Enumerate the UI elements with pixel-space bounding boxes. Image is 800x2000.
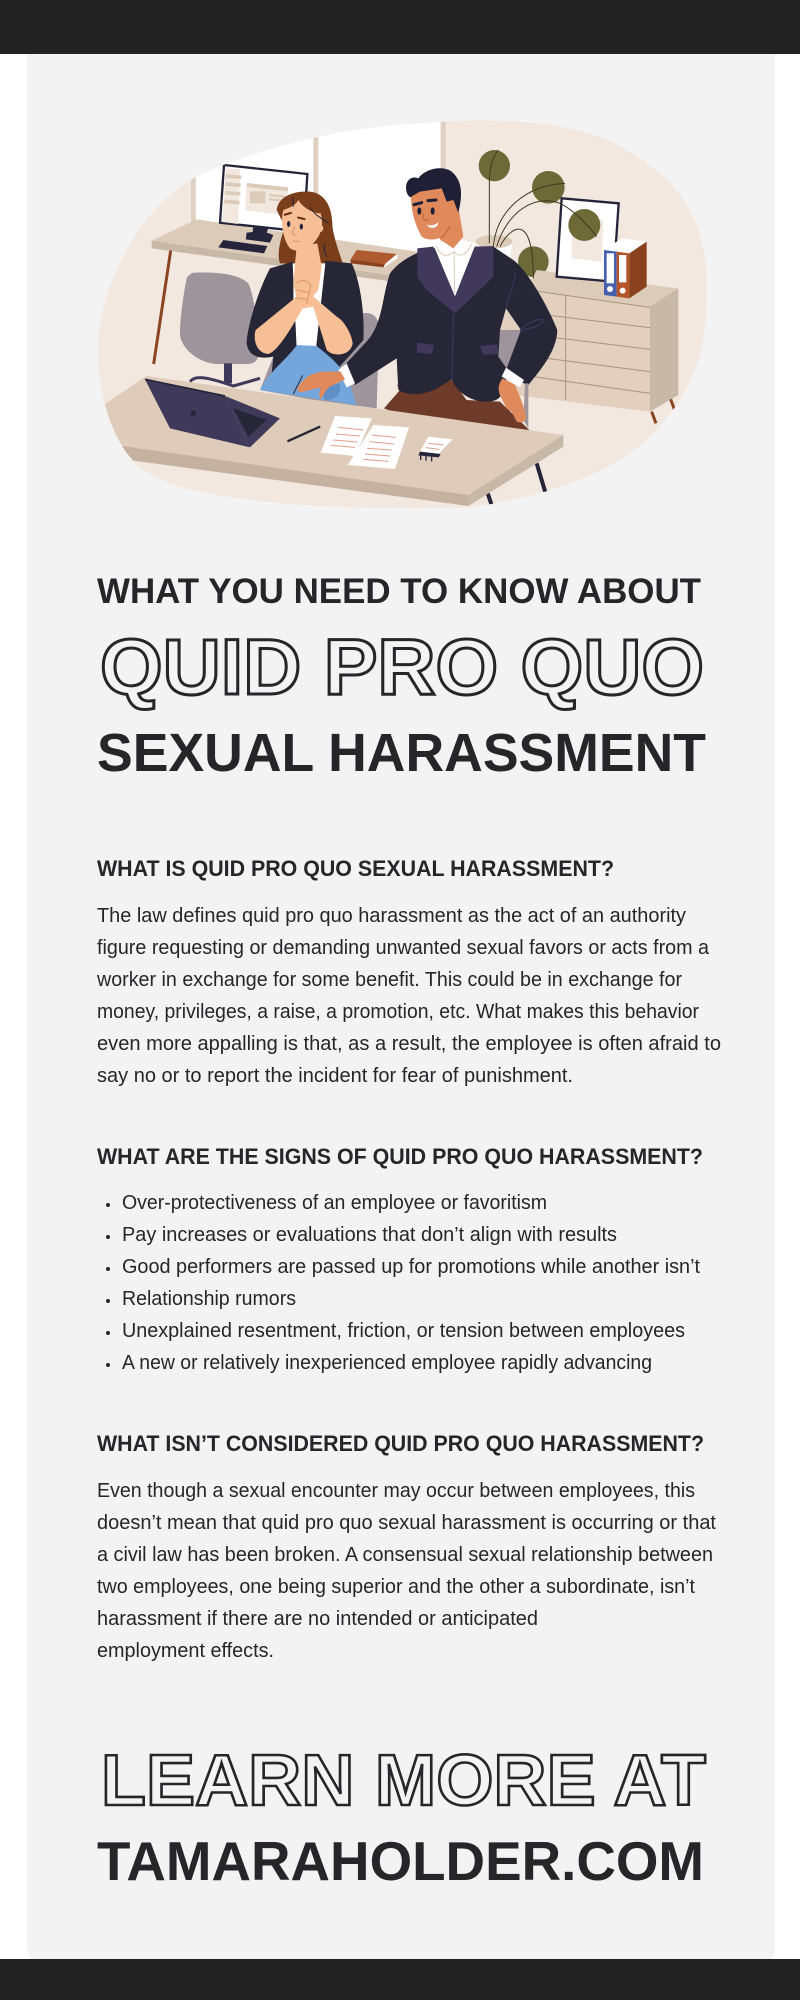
section body: The law defines quid pro quo harassment as the act of an authority [97,905,686,927]
woman's office chair [180,272,379,408]
shirt [433,237,476,297]
section body: a civil law has been broken. A consensual sexual relationship between [97,1544,713,1566]
section body: Even though a sexual encounter may occur between employees, this [97,1480,695,1502]
jacket [247,261,364,373]
face [282,200,322,251]
section body: even more appalling is that, as a result, the employee is often afraid to [97,1033,721,1055]
title line 1: WHAT YOU NEED TO KNOW ABOUT [97,572,701,611]
binders [604,238,647,298]
neck and chest [293,243,322,300]
bullet list: Relationship rumors [122,1288,296,1310]
sleeve lines and pockets [406,168,544,428]
learn more outlined: LEARN MORE AT [101,1741,706,1821]
monitor and keyboard [218,165,307,253]
skirt [260,345,356,405]
title [97,572,706,783]
bullet list [106,1192,700,1374]
section body: harassment if there are no intended or anticipated [97,1608,538,1630]
woman [247,192,364,405]
back desk [152,219,433,364]
notepad [418,437,453,461]
chair behind man [396,383,398,387]
title line 3: SEXUAL HARASSMENT [97,723,706,783]
book [351,250,397,267]
section body: doesn’t mean that quid pro quo sexual harassment is occurring or that [97,1512,716,1534]
bullet list: A new or relatively inexperienced employee rapidly advancing [122,1352,652,1374]
section body [96,905,721,1087]
plant stems and pot [476,150,565,277]
front desk [93,376,563,506]
top bar [0,0,800,54]
cabinet with plant, picture and binders [476,150,678,423]
section: signs [97,1144,703,1374]
section body: say no or to report the incident for fear of punishment. [97,1065,573,1087]
section: what it isn't [97,1431,716,1662]
papers [321,416,409,469]
front desk legs [488,463,547,505]
bullet list: Over-protectiveness of an employee or favoritism [122,1192,547,1214]
bullet list: Good performers are passed up for promotions while another isn’t [122,1256,700,1278]
neck and head [440,207,463,248]
hair [277,192,343,265]
section body: worker in exchange for some benefit. This could be in exchange for [96,969,682,991]
section heading: WHAT IS QUID PRO QUO SEXUAL HARASSMENT? [97,856,614,881]
section: what is it [96,856,721,1087]
blouse [293,263,325,348]
trousers [384,380,529,430]
call to action [97,1741,706,1892]
backdrop blob [98,120,706,508]
left cuff and hand on skirt [338,363,355,387]
cuff and right hand [502,368,524,387]
bullet list: Unexplained resentment, friction, or tension between employees [122,1320,685,1342]
section heading: WHAT ISN’T CONSIDERED QUID PRO QUO HARASSMENT? [97,1431,704,1456]
website: TAMARAHOLDER.COM [97,1830,704,1892]
section body [97,1480,716,1662]
section body: two employees, one being superior and the other a subordinate, isn’t [97,1576,695,1598]
illustration: office scene [98,120,706,508]
lapels [417,246,493,313]
window [191,122,446,252]
laptop [145,379,280,447]
jacket [343,247,557,402]
section body: employment effects. [97,1640,274,1662]
bottom bar [0,1959,800,2000]
section body: money, privileges, a raise, a promotion, etc. What makes this behavior [97,1001,699,1023]
section heading: WHAT ARE THE SIGNS OF QUID PRO QUO HARASSMENT? [97,1144,703,1169]
cabinet [500,270,678,423]
arms and hands [255,280,353,354]
title line 2 outlined: QUID PRO QUO [100,622,704,711]
picture frame [557,198,619,282]
section body: figure requesting or demanding unwanted sexual favors or acts from a [97,937,710,959]
bullet list: Pay increases or evaluations that don’t align with results [122,1224,617,1246]
man [297,168,557,430]
pen [288,375,319,441]
